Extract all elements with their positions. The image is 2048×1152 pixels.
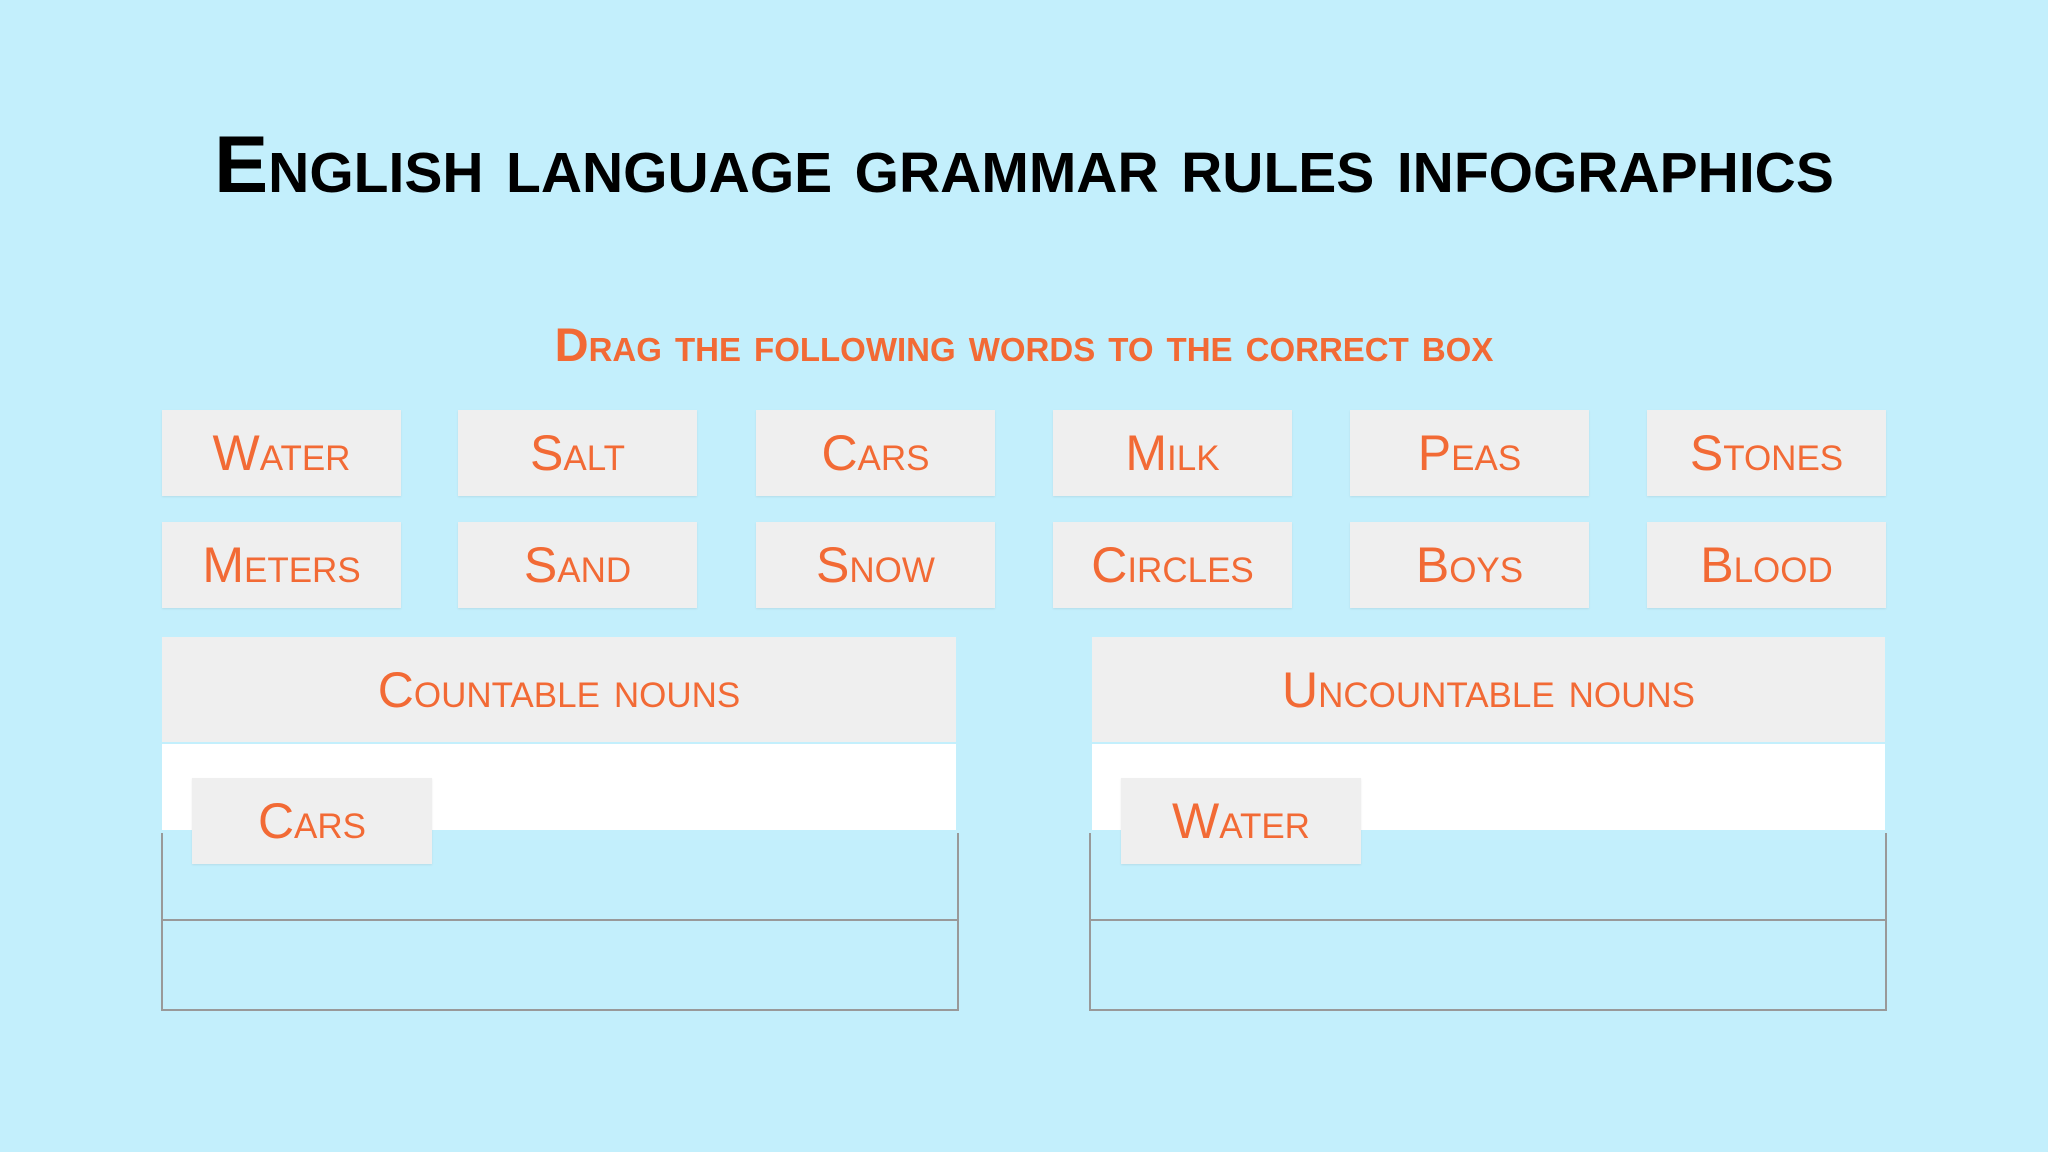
word: water [162,410,401,496]
word: sand: Sand [524,537,631,593]
word: blood [1647,522,1886,608]
word: peas: Peas [1418,425,1521,481]
word: circles [1053,522,1292,608]
word: milk [1053,410,1292,496]
word: circles: Circles [1091,537,1254,593]
word: cars [756,410,995,496]
word: snow [756,522,995,608]
panel: uncountable nouns [1089,637,1887,1011]
word: salt: Salt [530,425,625,481]
word: milk: Milk [1125,425,1220,481]
word: boys: Boys [1416,537,1523,593]
word: peas [1350,410,1589,496]
header: uncountable: Uncountable nouns [1282,662,1695,718]
chip: cars: Cars [258,793,366,849]
word grid [162,410,1886,609]
word: meters [162,522,401,608]
word: stones: Stones [1690,425,1843,481]
word: snow: Snow [816,537,935,593]
subtitle: Drag the following words to the correct box [555,318,1493,371]
word: cars: Cars [821,425,930,481]
title: English language grammar rules infographics [214,120,1834,210]
chip: cars [192,778,432,864]
header: countable [162,637,956,742]
word: stones [1647,410,1886,496]
word: salt [458,410,697,496]
word: sand [458,522,697,608]
word: blood: Blood [1700,537,1833,593]
header: countable: Countable nouns [378,662,740,718]
chip: water: Water [1172,793,1310,849]
panel: countable nouns [161,637,959,1011]
chip: water [1121,778,1361,864]
header: uncountable [1092,637,1885,742]
word: boys [1350,522,1589,608]
word: water: Water [213,425,350,481]
word: meters: Meters [202,537,361,593]
